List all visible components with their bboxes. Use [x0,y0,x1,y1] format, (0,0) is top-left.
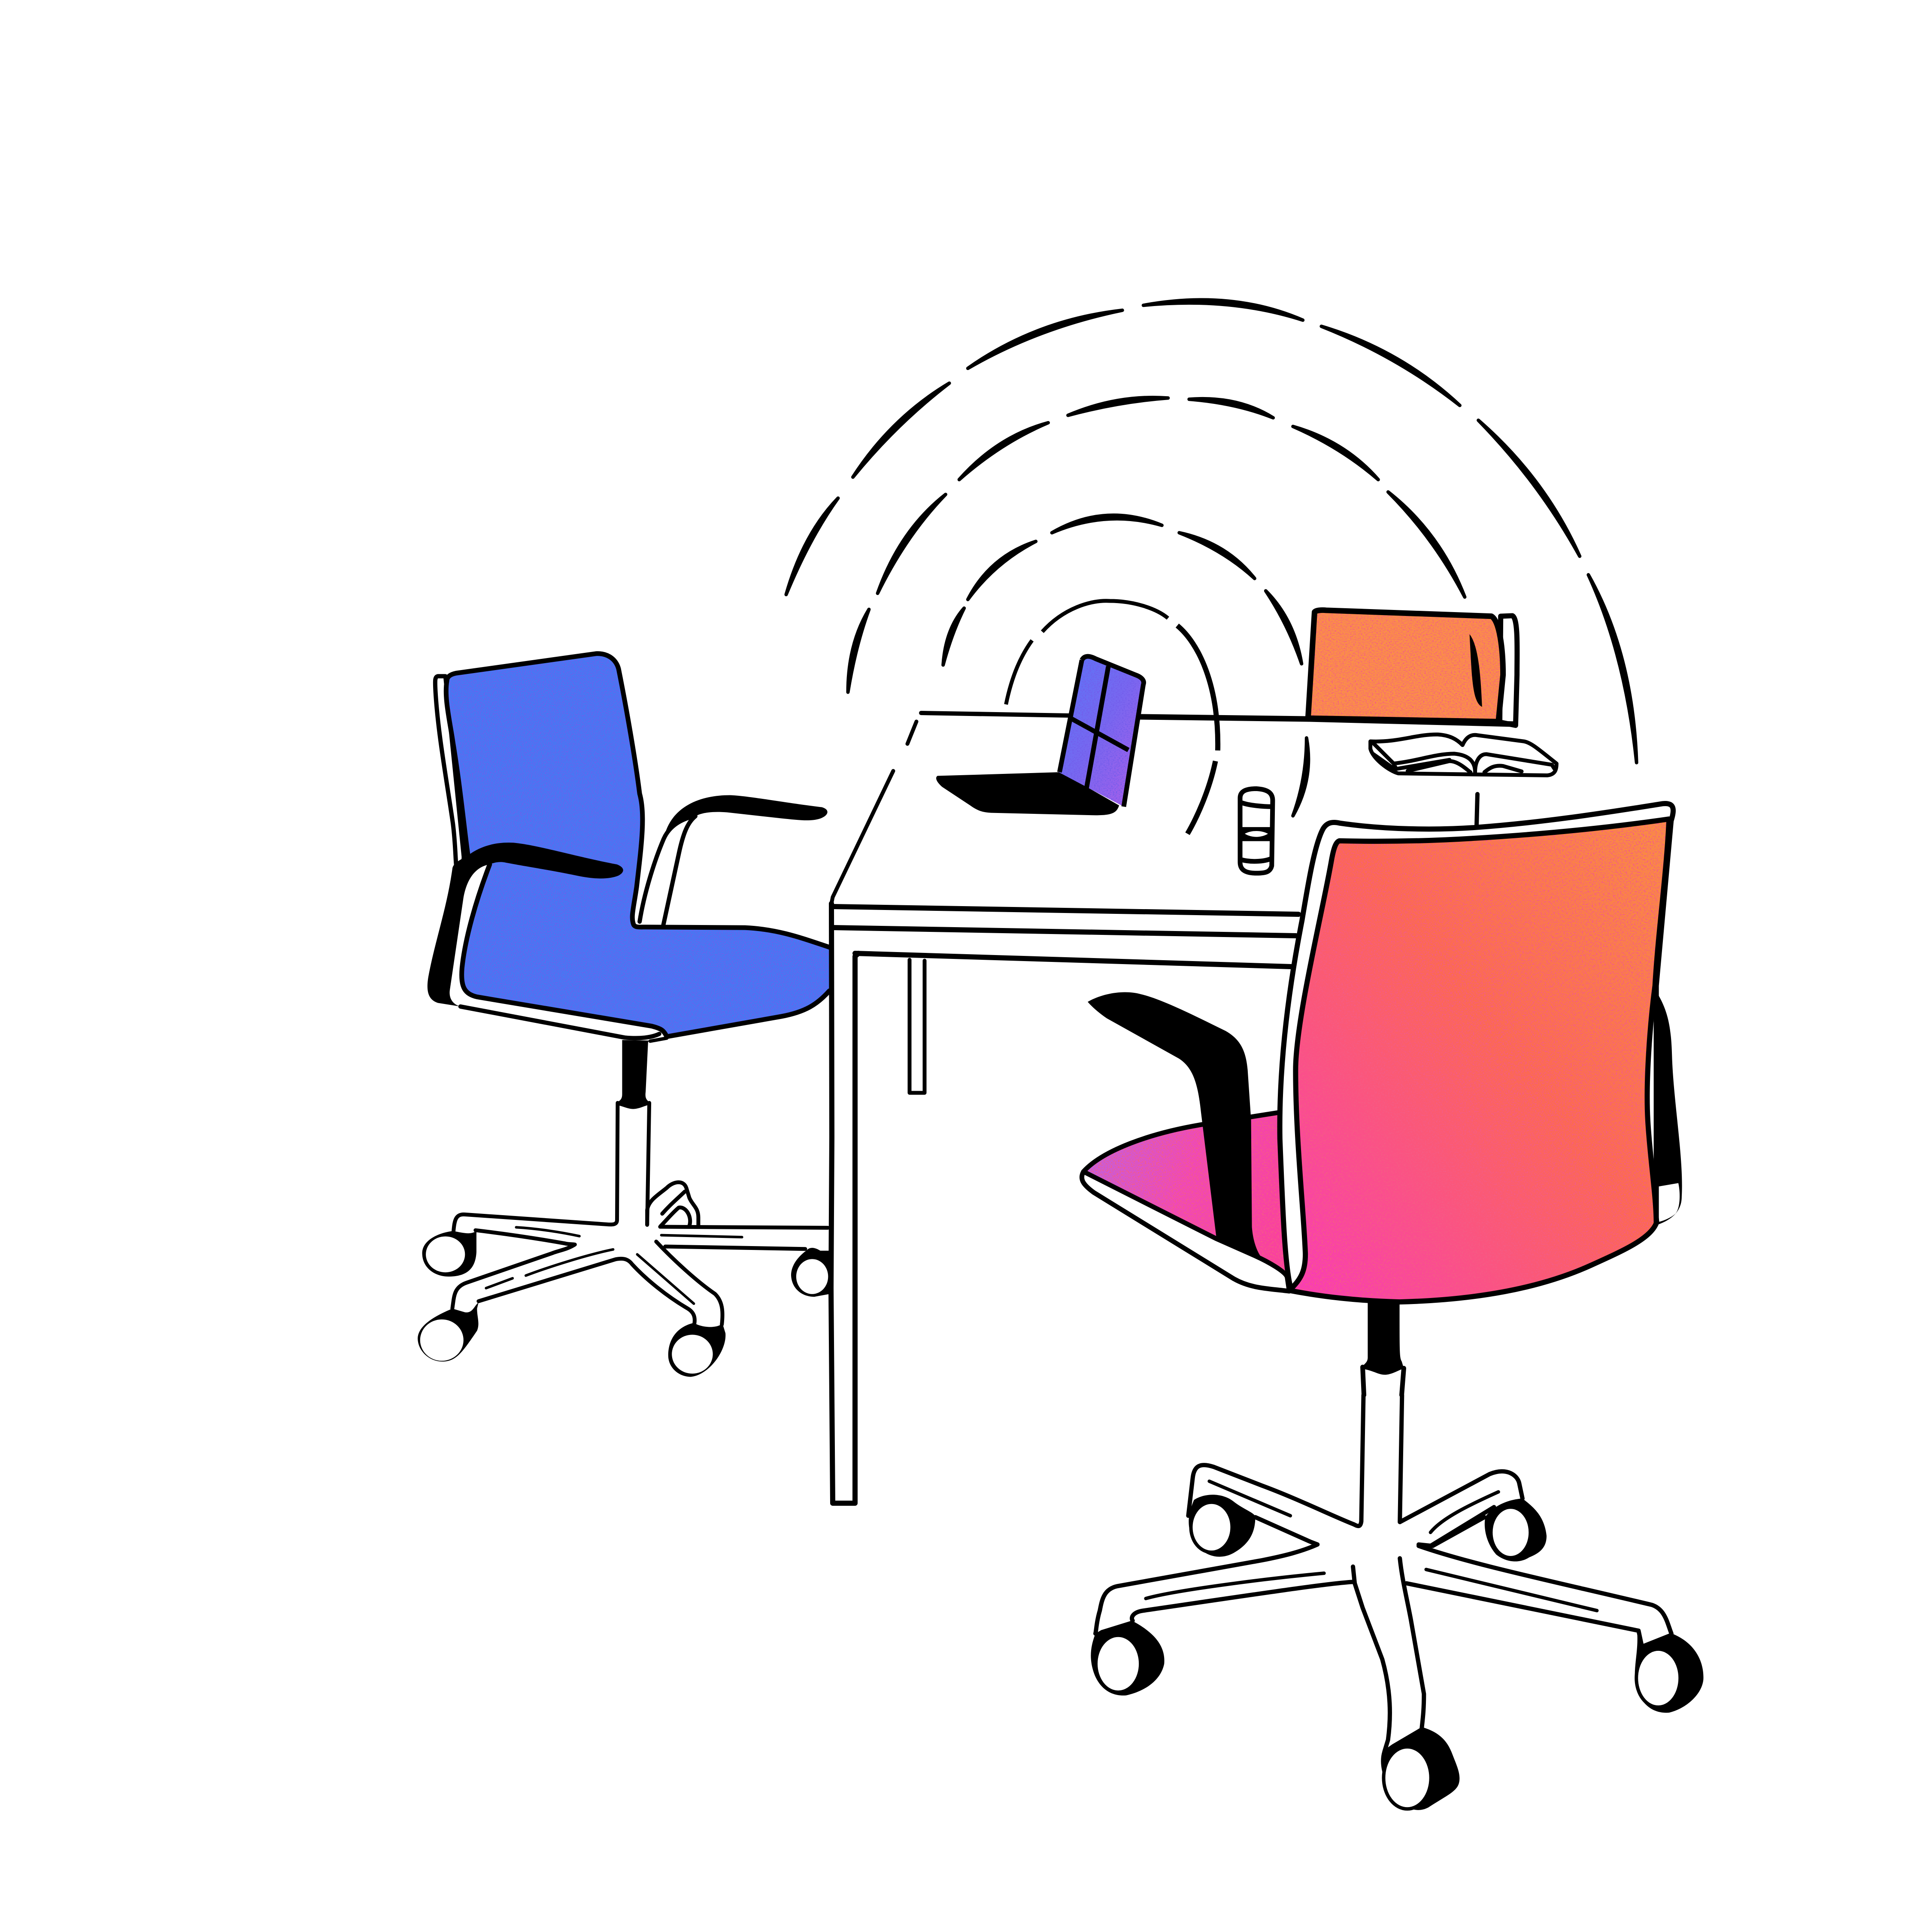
back chair upholstery [1308,610,1503,722]
front chair seat and back [1082,804,1682,1395]
star base detail lines [1146,1481,1597,1611]
front chair base [1091,1395,1703,1810]
caster: back-left [422,1231,476,1277]
caster right hub [1636,1649,1680,1707]
laptop screen outline and panes [1059,656,1143,807]
glass band highlight [1245,831,1268,837]
table back edge right [1140,717,1515,724]
back-left leg [910,960,925,1093]
back upholstery outline [1289,819,1669,1302]
seat outline [1083,1112,1281,1172]
near armrest and frame black mass [428,843,623,1007]
blue chair [418,654,831,1377]
wifi inner ring [1006,601,1218,834]
back chair frame [1500,616,1517,725]
caster: front [1381,1727,1459,1810]
table edge lines [833,907,1298,967]
caster: back-right [1485,1498,1547,1562]
glass outline [1240,789,1273,873]
gas stem [1363,1302,1404,1375]
star base outlines [452,1103,828,1325]
book cover [1371,734,1556,775]
caster front hub [672,1335,713,1374]
laptop screen [1059,656,1143,807]
caster: front-left [1091,1621,1165,1695]
glass rim lines [1241,803,1272,861]
caster: front-left [418,1302,479,1362]
right side frame black [1646,992,1682,1224]
gas stem [618,1040,649,1109]
back upholstery [1293,819,1669,1301]
back chair slit [1470,634,1482,707]
blue chair base [418,1040,831,1377]
blue upholstery [446,655,829,1035]
seat frame lower edge [461,1007,659,1038]
front-left leg [831,904,858,1503]
caster: back-left [1189,1495,1255,1557]
table left edge [831,722,916,904]
caster front-left hub [420,1319,464,1361]
third ring [943,515,1308,816]
right side white tab [1656,1183,1680,1222]
glass [1240,789,1273,873]
glass band [1240,827,1272,841]
second ring [848,397,1465,692]
seat underside right [650,1038,667,1041]
caster: front [668,1323,725,1377]
front chair [1082,804,1703,1810]
seat frame [1082,1172,1289,1291]
table objects [936,656,1556,873]
armrest black [1088,992,1262,1258]
far armrest pad [664,795,828,839]
wifi signal arcs [786,300,1637,816]
seat fill [1083,1113,1286,1271]
caster back-left hub [426,1236,465,1272]
caster: right [1635,1633,1703,1713]
table back edge [921,713,1070,716]
cylinder top [1363,1367,1404,1395]
caster: right [791,1248,831,1297]
caster back-left hub [1191,1502,1232,1552]
caster back-right hub [1491,1507,1530,1558]
frame edge of backrest [435,676,464,868]
far armrest struts [640,816,695,926]
back chair outline [1308,610,1503,722]
outer ring [786,300,1637,763]
laptop base [936,772,1119,815]
table [831,713,1515,1503]
inner ring right [1177,625,1218,834]
caster front hub [1383,1747,1431,1809]
back frame [1280,804,1673,1301]
book [1371,734,1556,775]
star base detail lines [486,1227,742,1304]
inner ring segments [1006,601,1168,704]
caster front-left hub [1096,1635,1140,1692]
back chair: orange [1308,610,1517,725]
blue upholstery outline [446,654,829,1037]
book pages [1373,743,1554,772]
caster right hub [796,1259,828,1294]
star base outlines [1095,1395,1671,1751]
blue chair seat and back [428,654,829,1041]
back-right leg [647,1182,698,1226]
